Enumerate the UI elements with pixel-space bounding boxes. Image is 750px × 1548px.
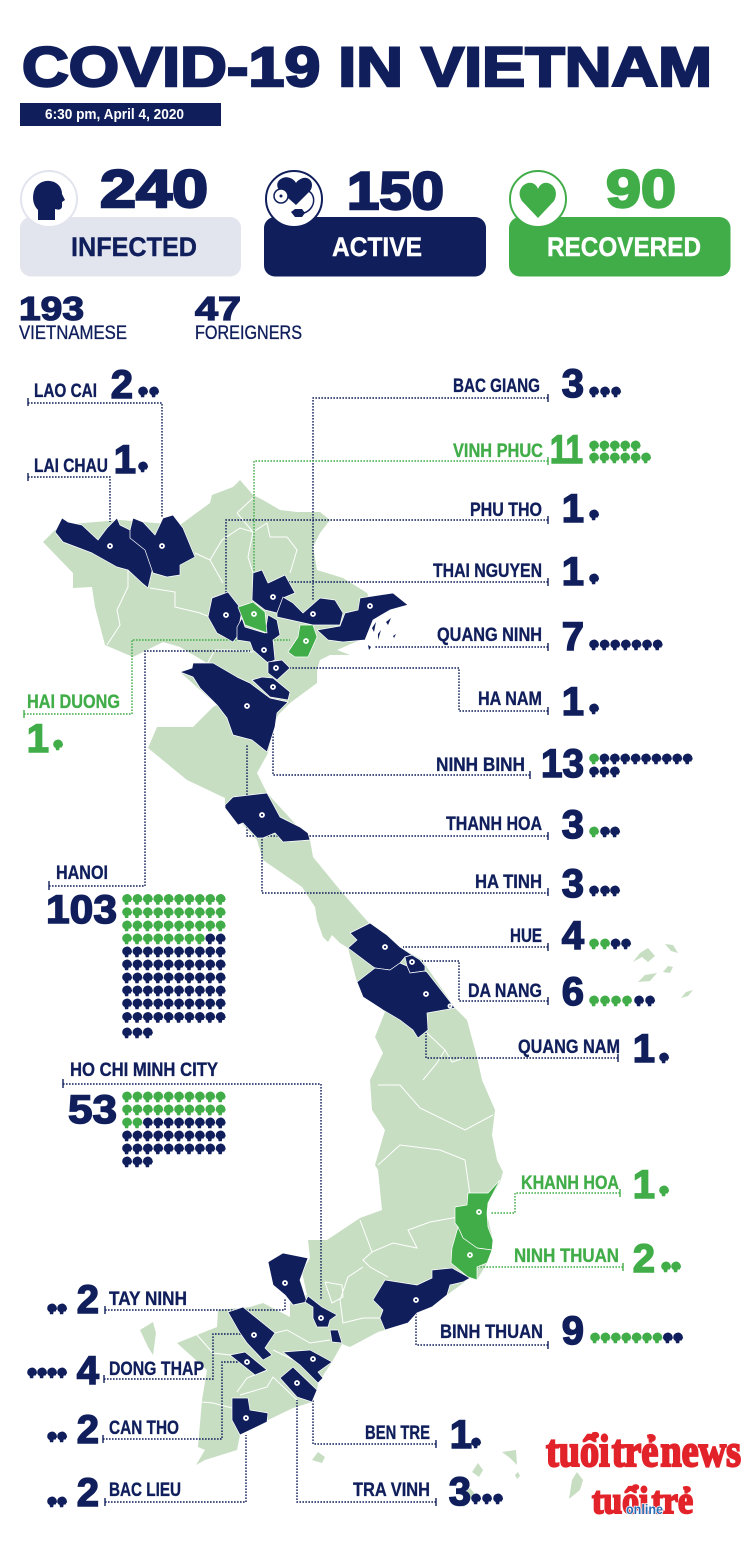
callout: Ben Tre: BEN TRE: [365, 1422, 430, 1444]
callout: Quang Ninh: QUANG NINH: [437, 624, 542, 646]
callout: Hai Duong: 1: [27, 717, 49, 761]
panel: recovered: [509, 160, 730, 276]
province: Tra Vinh: [280, 1367, 317, 1402]
callout: Bac Giang: [453, 362, 621, 406]
callout: Ha Tinh: [475, 862, 620, 906]
callout: Lai Chau: [34, 438, 148, 482]
callout: Tra Vinh: 3: [449, 1470, 471, 1514]
province: Dong Thap: [228, 1307, 275, 1360]
callout: Khanh Hoa: [521, 1163, 669, 1207]
callout: Ninh Binh: [436, 742, 693, 786]
callout: Ninh Thuan: [514, 1237, 681, 1281]
stat: 47 foreigners: 47: [195, 290, 241, 327]
province: Khanh Hoa: [455, 1180, 500, 1250]
province: Ben Tre: [283, 1350, 332, 1383]
panel: infected: 240: [100, 160, 208, 219]
province: Hanoi: [237, 615, 280, 663]
callout: Hai Duong: HAI DUONG: [27, 691, 120, 713]
province: Thanh Hoa: [225, 793, 310, 842]
callout: Tay Ninh: TAY NINH: [109, 1288, 187, 1310]
stat: 47 foreigners: [195, 290, 302, 344]
callout: Phu Tho: [470, 487, 599, 531]
panel: active: [264, 162, 486, 276]
callout: Vinh Phuc: [453, 428, 651, 472]
callout: Thai Nguyen: 1: [562, 550, 584, 594]
callout: Bac Lieu: [47, 1471, 181, 1515]
logo: tuoi tre online: online: [626, 1501, 663, 1517]
callout: Ha Nam: [478, 680, 599, 724]
province: Vinh Phuc: [238, 602, 267, 633]
province: Nam Dinh: [252, 677, 290, 700]
callout: Quang Ninh: [437, 615, 663, 659]
callout: Quang Nam: 1: [633, 1027, 655, 1071]
callout: Vinh Phuc: 11: [550, 428, 583, 472]
callout: Ninh Binh: 13: [541, 742, 584, 786]
callout: Tra Vinh: TRA VINH: [353, 1479, 430, 1501]
callout: Bac Lieu: 2: [77, 1471, 99, 1515]
callout: Ben Tre: 1: [450, 1413, 472, 1457]
leader lines: [24, 394, 623, 1506]
callout: Da Nang: DA NANG: [468, 980, 542, 1002]
logo: tuoi tre online: tuổi trẻ: [592, 1480, 693, 1522]
province: Hai Duong: [288, 625, 317, 657]
map base: Vietnam land and islands: [43, 480, 693, 1508]
callout: Thanh Hoa: [446, 803, 620, 847]
callout: Dong Thap: 4: [77, 1349, 100, 1393]
icon: stethoscope heart: [266, 171, 322, 227]
callout: Thanh Hoa: 3: [562, 803, 584, 847]
stat: 47 foreigners: FOREIGNERS: [195, 322, 302, 344]
province: Bac Lieu: [232, 1398, 268, 1435]
callout: Hanoi: 103: [46, 888, 117, 932]
callout: Ha Nam: 1: [562, 680, 584, 724]
callout: Quang Nam: QUANG NAM: [518, 1036, 620, 1058]
panel: infected: [20, 160, 241, 276]
province: Hue: [348, 923, 412, 970]
province: Phu Tho: [208, 592, 242, 642]
callout: Hue: HUE: [510, 925, 542, 947]
callout: Binh Thuan: [440, 1309, 683, 1353]
panel: infected: INFECTED: [71, 232, 197, 262]
province: Lai Chau: [55, 518, 153, 588]
callout: Lao Cai: 2: [111, 363, 133, 407]
panel: active: ACTIVE: [332, 232, 422, 262]
pictogram: Hanoi cases: [122, 894, 226, 1038]
callout: Phu Tho: 1: [562, 487, 584, 531]
callout: Vinh Phuc: VINH PHUC: [453, 440, 543, 462]
callout: Quang Ninh: 7: [562, 615, 584, 659]
callout: Hai Duong: [27, 691, 120, 761]
panel: active: 150: [347, 162, 444, 221]
map: highlighted provinces: [55, 515, 500, 1435]
date bar: [20, 103, 221, 126]
callout: Ho Chi Minh City: 53: [68, 1088, 117, 1132]
date bar: 6:30 pm, April 4, 2020: [45, 106, 184, 123]
callout: Thanh Hoa: THANH HOA: [446, 813, 542, 835]
province: Thai Nguyen: [252, 570, 295, 613]
callout: Ben Tre: [365, 1413, 481, 1457]
province: Bac Giang: [277, 597, 343, 625]
callout: Ninh Thuan: NINH THUAN: [514, 1245, 619, 1267]
callout: Lai Chau: LAI CHAU: [34, 455, 108, 477]
title: COVID-19 IN VIETNAM: [22, 35, 712, 98]
pictogram: HCMC cases: [122, 1092, 226, 1167]
callout: Da Nang: [468, 970, 655, 1014]
callout: Ninh Binh: NINH BINH: [436, 754, 525, 776]
callout: Hanoi: HANOI: [56, 862, 108, 884]
callout: Can Tho: 2: [77, 1408, 99, 1452]
callout: Khanh Hoa: KHANH HOA: [521, 1172, 619, 1194]
callout: Tay Ninh: [47, 1278, 187, 1322]
callout: Tay Ninh: 2: [77, 1278, 99, 1322]
province: Da Nang: [405, 955, 425, 973]
icon: heart: [510, 171, 566, 227]
callout: Lai Chau: 1: [114, 438, 136, 482]
icon: head: [21, 171, 77, 227]
callout: Bac Giang: 3: [562, 362, 584, 406]
callout: Hue: 4: [562, 914, 585, 958]
callout: Hanoi: [46, 862, 226, 1038]
province: Ha Nam: [268, 660, 290, 680]
province: Ninh Binh: [180, 663, 288, 752]
callout: Ho Chi Minh City: [68, 1059, 226, 1167]
location markers: [108, 544, 481, 1420]
callout: Dong Thap: [27, 1349, 204, 1393]
callout: Lao Cai: [34, 363, 159, 407]
province: Tay Ninh: [268, 1253, 308, 1305]
callout: Thai Nguyen: [433, 550, 599, 594]
province: Can Tho: [230, 1352, 267, 1375]
callout: Bac Giang: BAC GIANG: [453, 375, 540, 397]
panel: recovered: 90: [606, 160, 676, 219]
callout: Ha Tinh: HA TINH: [475, 871, 542, 893]
province: Binh Thuan: [373, 1268, 470, 1330]
stat: 193 Vietnamese: VIETNAMESE: [19, 322, 127, 344]
stat: 193 Vietnamese: [19, 290, 127, 344]
callout: Dong Thap: DONG THAP: [109, 1358, 204, 1380]
callout: Ho Chi Minh City: HO CHI MINH CITY: [70, 1059, 218, 1081]
province: Lao Cai: [130, 515, 195, 577]
callout: Hue: [510, 914, 631, 958]
province: Quang Ninh: [317, 593, 408, 650]
callout: Khanh Hoa: 1: [633, 1163, 655, 1207]
callout: Binh Thuan: BINH THUAN: [440, 1321, 543, 1343]
callout: Ha Tinh: 3: [562, 862, 584, 906]
province: Quang Nam: [357, 963, 455, 1038]
callout: Phu Tho: PHU THO: [470, 499, 542, 521]
callout: Da Nang: 6: [562, 970, 584, 1014]
callout: Bac Lieu: BAC LIEU: [109, 1479, 181, 1501]
callout: Thai Nguyen: THAI NGUYEN: [433, 560, 542, 582]
callout: Lao Cai: LAO CAI: [34, 380, 97, 402]
callout: Quang Nam: [518, 1027, 669, 1071]
callout: Can Tho: CAN THO: [109, 1417, 179, 1439]
callout: Ha Nam: HA NAM: [478, 688, 542, 710]
province: Ho Chi Minh City: [305, 1296, 342, 1343]
callout: Binh Thuan: 9: [562, 1309, 584, 1353]
stat: 193 Vietnamese: 193: [19, 290, 84, 327]
panel: recovered: RECOVERED: [547, 232, 701, 262]
province: Ninh Thuan: [451, 1227, 492, 1280]
callout: Ninh Thuan: 2: [633, 1237, 655, 1281]
callout: Tra Vinh: [353, 1470, 503, 1514]
callout: Can Tho: [47, 1408, 179, 1452]
